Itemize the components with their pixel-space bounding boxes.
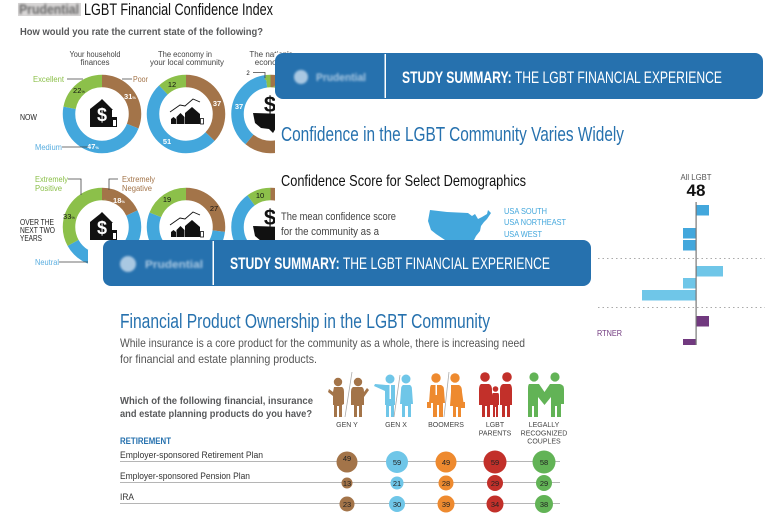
text block: mean confidence score: for the community as a [281,226,380,238]
legend: now: Medium [35,142,62,152]
legend: next two years: Neutral [35,257,59,267]
donut value labels: 19 [163,195,171,204]
legend: next two years: Positive [35,183,62,193]
column headings: finances [80,58,110,67]
subheading: confidence score: Confidence Score for Select Demographics [281,173,526,190]
icon: town and trend line, now [170,99,204,124]
donut: household finances next two years [69,194,135,260]
bar chart: confidence deviation [598,202,765,345]
column headings: your local community [150,58,224,67]
legend: now: Excellent [33,74,65,84]
row labels: YEARS [20,234,42,243]
legend: now [33,72,265,152]
map region labels: USA WEST [504,230,542,239]
chart: retirement bubbles: 28 [442,479,450,488]
column labels: COUPLES [527,438,561,446]
title: LGBT Financial Confidence Index: Prudential [19,1,79,17]
text block: mean confidence score: The mean confidence score [281,211,396,223]
chart: retirement bubbles: 38 [540,500,548,509]
title: LGBT Financial Confidence Index: LGBT Financial Confidence Index [84,1,274,19]
banner: study summary, upper: Prudential [316,72,366,84]
donut value labels: 27 [210,204,218,213]
column headings: economy [255,58,287,67]
text block: intro: While insurance is a core product for the community as a whole, there is increasing need [120,336,525,350]
map region labels: USA NORTHEAST [504,218,566,227]
icon: dollar over USA, future [253,205,287,246]
chart: retirement bubbles: 39 [442,500,450,509]
icon: house with dollar, future [90,212,117,240]
all LGBT score: All LGBT [680,173,712,182]
donut value labels: 37 [235,102,243,111]
column headings: The nation's [249,50,293,59]
chart: retirement bubbles: 49 [343,454,351,463]
question heading: How would you rate the current state of the following? [20,26,263,38]
donut value labels: 10 [256,191,264,200]
banner: study summary, lower: STUDY SUMMARY: THE LGBT FINANCIAL EXPERIENCE [230,255,550,273]
legend: now: Poor [133,74,148,84]
column labels: LEGALLY [529,422,560,429]
chart: retirement bubbles: 30 [393,500,401,509]
donut value labels: 51 [163,137,171,146]
icon: legally recognized couple [528,372,564,417]
donut value labels: 31% [124,92,136,101]
section label: retirement: RETIREMENT [120,436,171,446]
donut: household finances now [69,81,135,147]
legend: next two years [35,174,156,267]
icon: town and trend line, future [170,212,204,237]
icon: house with dollar, now [90,99,117,127]
column headings: The economy in [158,50,212,59]
column headings: Your household [70,50,120,59]
legend: next two years: Extremely [122,174,156,184]
donut: local economy now [153,81,219,147]
icon: Boomers couple [427,372,465,417]
all LGBT score: 48 [687,181,705,200]
question: products: Which of the following financial, insurance [120,395,313,407]
partner row label: RTNER [597,329,622,338]
chart: retirement bubbles: 49 [442,458,450,467]
chart: retirement bubbles: 58 [540,458,548,467]
chart: retirement bubbles: 59 [491,458,499,467]
chart: retirement bubbles: 23 [343,500,351,509]
donut value labels: 47% [87,142,99,151]
heading: product ownership: Financial Product Ownership in the LGBT Community [120,311,490,333]
panel: Confidence in the LGBT Community page [275,53,765,520]
column headings [70,50,293,67]
icon: Gen Y couple [328,372,369,417]
title: LGBT Financial Confidence Index [18,1,274,19]
legend: next two years: Negative [122,183,152,193]
chart: retirement bubbles: 59 [393,458,401,467]
column labels: RECOGNIZED [521,430,567,438]
banner: study summary, upper [275,53,763,99]
text block: intro [120,336,525,366]
column labels: PARENTS [479,430,512,438]
all LGBT score [680,173,712,200]
donut: national economy next two years [238,194,304,260]
donut value labels: 33% [63,212,75,221]
row labels: OVER THE [20,218,54,227]
question: products [120,395,313,420]
icon: Gen X couple [374,374,413,417]
donut value labels: 22% [73,86,85,95]
chart: retirement bubbles: 29 [540,479,548,488]
icon: LGBT parents family [479,372,512,417]
text block: intro: for financial and estate planning products. [120,352,317,366]
chart: retirement bubbles: 34 [491,500,499,509]
column labels: BOOMERS [428,422,464,429]
chart: retirement bubbles: 29 [491,479,499,488]
chart: retirement bubbles: 21 [393,479,401,488]
legend: next two years: Extremely [35,174,69,184]
row labels: NEXT TWO [20,226,55,235]
banner: study summary, lower [103,240,591,286]
row labels: retirement products: Employer-sponsored Retirement Plan [120,450,263,461]
row labels: NOW [20,113,37,122]
question: products: and estate planning products do you have? [120,408,312,420]
panel: LGBT Financial Confidence Index page [18,1,304,267]
panel: Financial Product Ownership page [88,240,597,520]
row labels [20,113,55,243]
column labels: GEN Y [336,422,358,429]
chart: retirement bubbles [120,450,560,513]
map region labels: USA SOUTH [504,207,547,216]
row labels: retirement products [120,450,263,503]
map region labels [504,207,566,239]
banner: study summary, lower: Prudential [145,259,203,271]
row labels: retirement products: Employer-sponsored Pension Plan [120,471,250,482]
icon: USA map [428,210,491,240]
chart: retirement bubbles: 13 [343,479,351,488]
column labels: GEN X [385,422,407,429]
donut value labels: 12 [168,80,176,89]
text block: mean confidence score [281,211,396,238]
donut: national economy now [238,81,304,147]
donut value labels: 2 [246,71,250,77]
donut value labels: 18% [113,196,125,205]
icon: dollar over USA, now [253,92,287,133]
heading: confidence varies: Confidence in the LGBT Community Varies Widely [281,124,624,146]
donut value labels [63,71,264,221]
column labels: LGBT [486,422,505,429]
donut: local economy next two years [153,194,219,260]
donut value labels: 37 [213,99,221,108]
column labels [336,422,567,446]
row labels: retirement products: IRA [120,492,135,503]
